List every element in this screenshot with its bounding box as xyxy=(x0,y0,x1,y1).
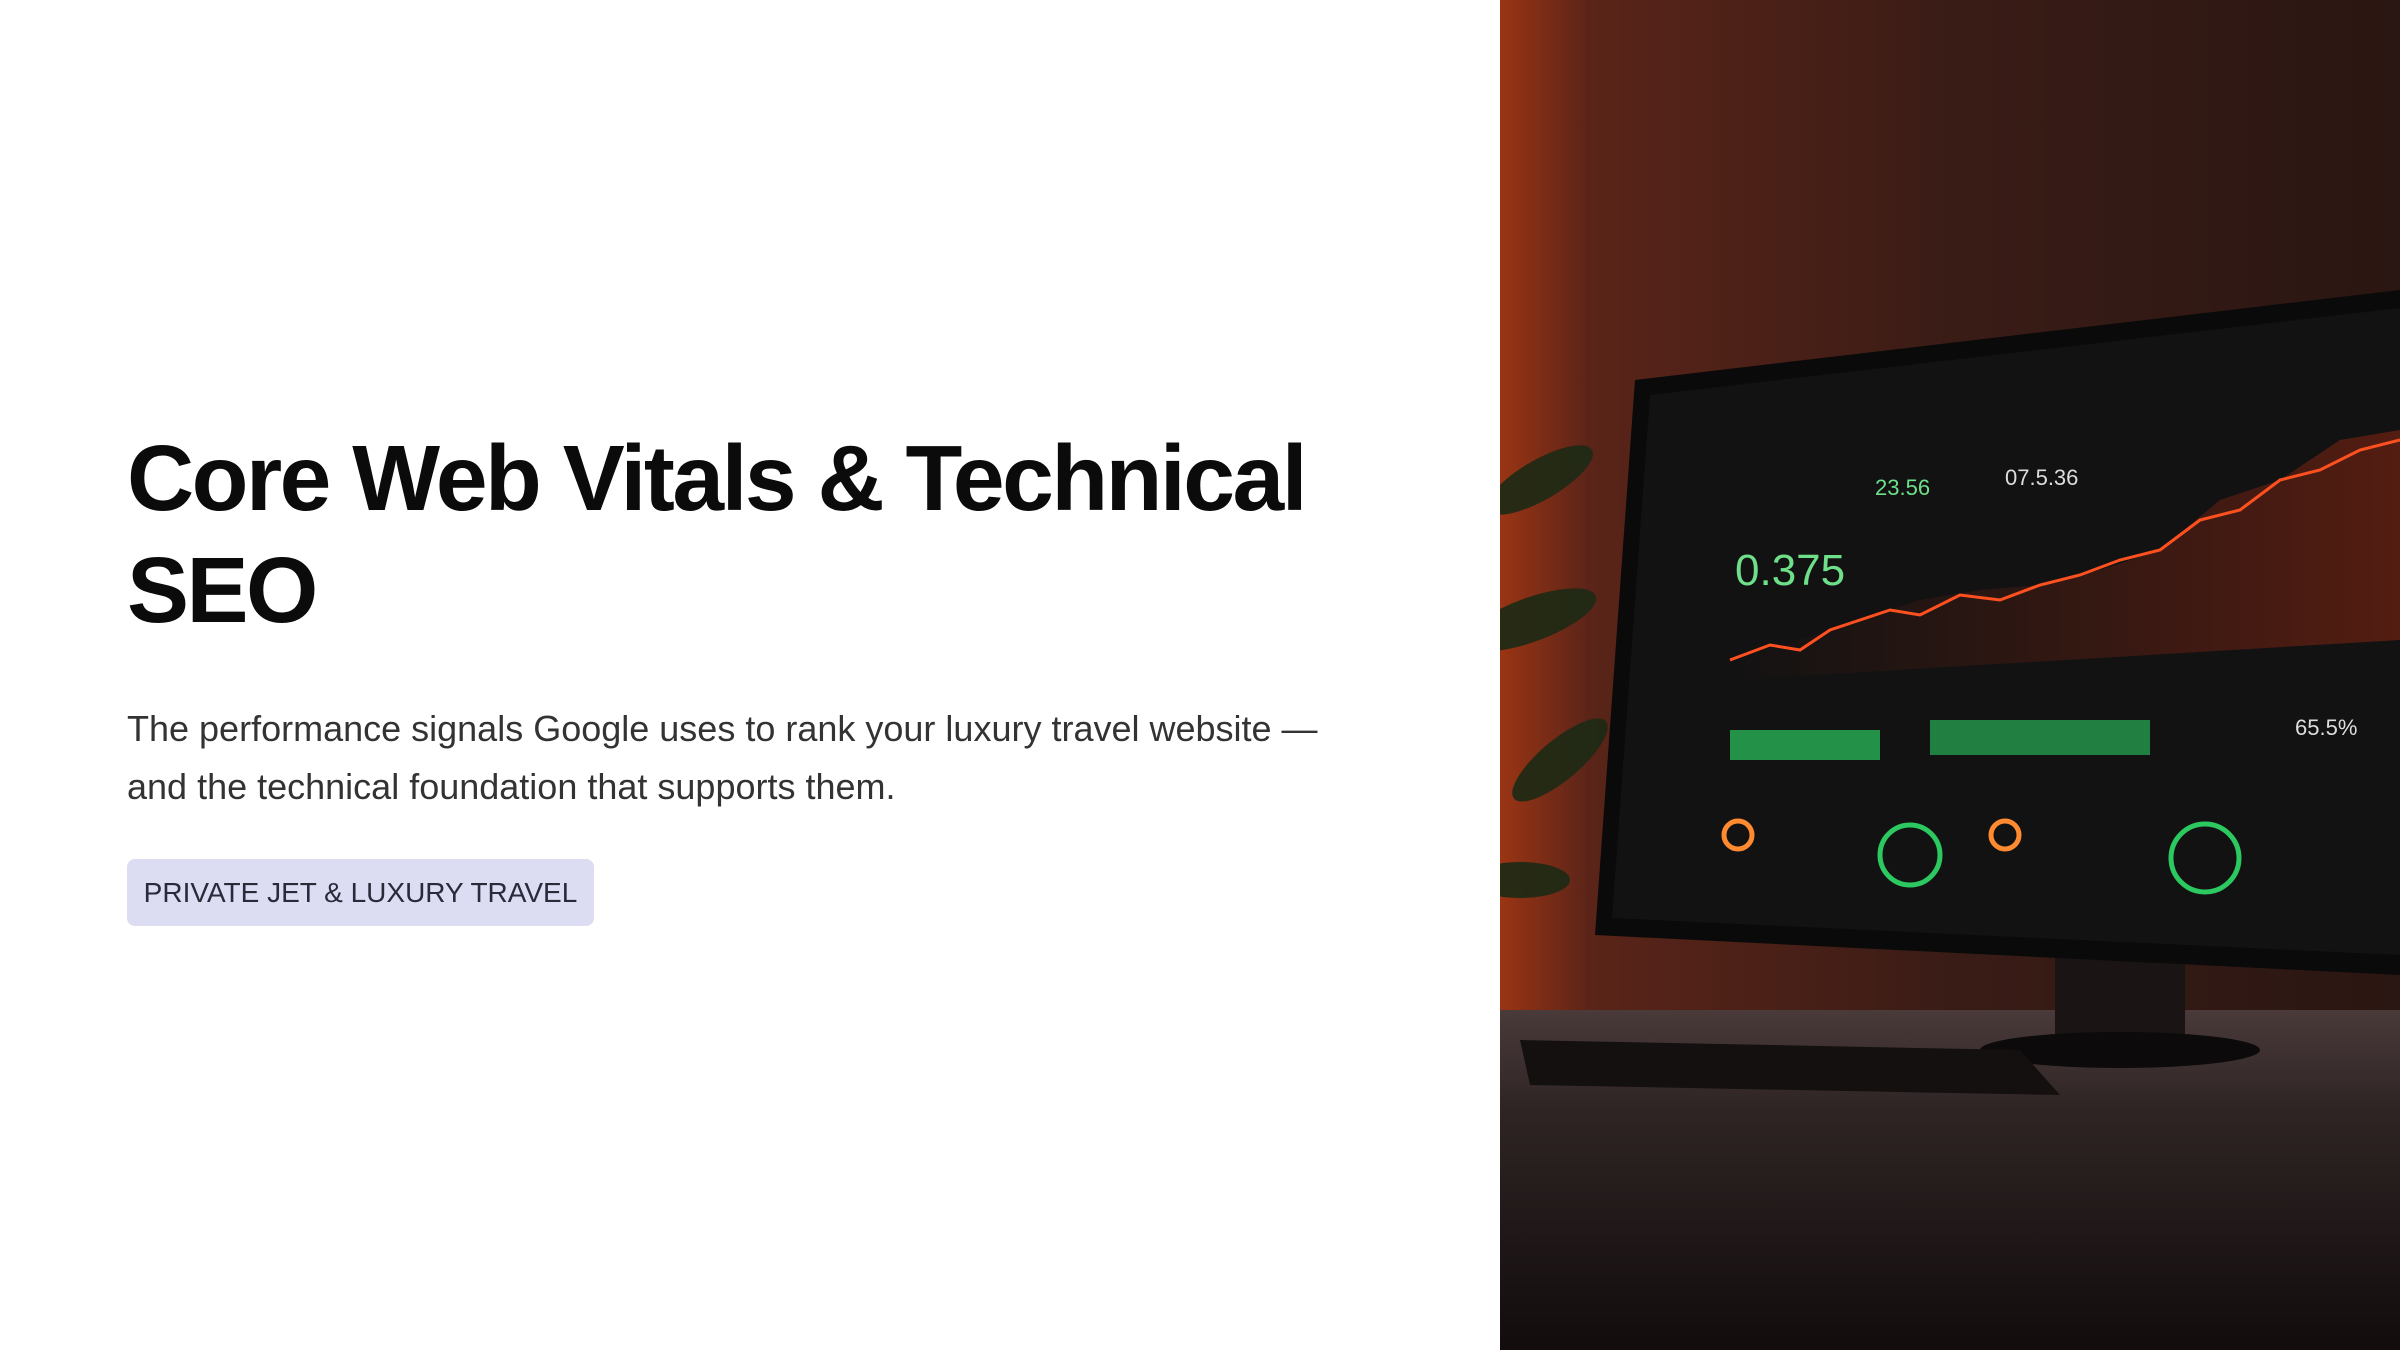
subtitle text xyxy=(127,708,1318,807)
keyboard xyxy=(1520,1040,2060,1095)
title: Core Web Vitals & Technical xyxy=(127,426,1305,530)
tag: category xyxy=(127,859,594,926)
monitor stand xyxy=(1980,955,2260,1068)
monitor: 65.5% xyxy=(2295,715,2357,740)
subtitle text: and the technical foundation that supports them. xyxy=(127,766,896,807)
title xyxy=(127,426,1305,642)
tag: category: PRIVATE JET & LUXURY TRAVEL xyxy=(144,877,577,908)
desk xyxy=(1500,1010,2400,1350)
title: SEO xyxy=(127,538,316,642)
monitor: 23.56 xyxy=(1875,475,1930,500)
monitor: 07.5.36 xyxy=(2005,465,2078,490)
monitor: 0.375 xyxy=(1735,546,1845,595)
photo: analytics dashboard monitor xyxy=(1500,0,2400,1350)
monitor xyxy=(1595,290,2400,975)
subtitle text: The performance signals Google uses to rank your luxury travel website — xyxy=(127,708,1318,749)
plant xyxy=(1457,433,1619,898)
